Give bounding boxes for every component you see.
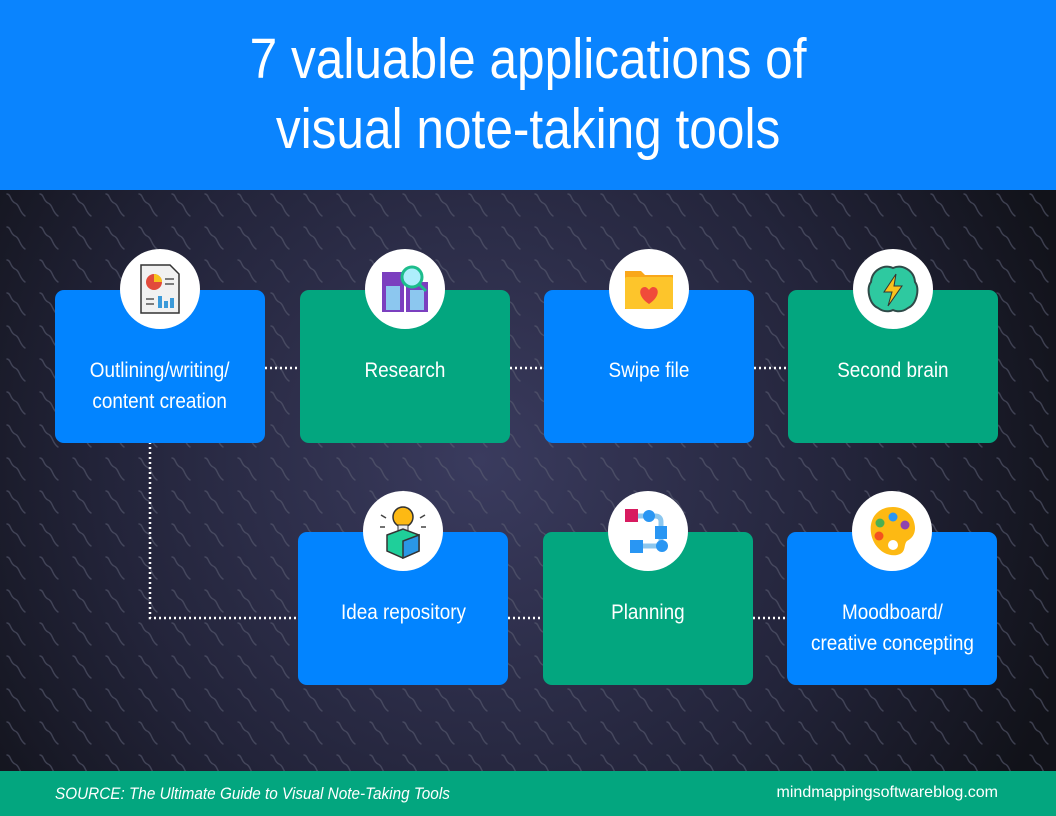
icon: research books bbox=[365, 249, 445, 329]
box: outlining: content creation bbox=[93, 390, 227, 412]
box: planning: Planning bbox=[611, 601, 685, 624]
box: second brain bbox=[788, 290, 998, 443]
box: idea repository bbox=[298, 532, 508, 685]
title: 7 valuable applications of bbox=[250, 27, 806, 91]
box: second brain: Second brain bbox=[837, 359, 949, 382]
box: outlining: Outlining/writing/ bbox=[90, 358, 230, 382]
source text: SOURCE: The Ultimate Guide to Visual Note-Taking Tools bbox=[55, 784, 450, 803]
box: moodboard: creative concepting bbox=[811, 632, 973, 654]
icon: brain bbox=[853, 249, 933, 329]
icon: idea box bbox=[363, 491, 443, 571]
background pattern bbox=[6, 190, 1056, 771]
title bbox=[0, 0, 1056, 190]
box: outlining bbox=[55, 290, 265, 443]
box: idea repository: Idea repository bbox=[340, 601, 466, 624]
title: visual note-taking tools bbox=[276, 97, 780, 161]
box: moodboard bbox=[787, 532, 997, 685]
website: mindmappingsoftwareblog.com bbox=[777, 784, 998, 801]
icon: flow diagram bbox=[608, 491, 688, 571]
box: planning bbox=[543, 532, 753, 685]
connectors bbox=[150, 368, 788, 618]
box: research: Research bbox=[365, 359, 445, 382]
icon: folder heart bbox=[609, 249, 689, 329]
icon: document bbox=[120, 249, 200, 329]
box: swipe file: Swipe file bbox=[609, 359, 689, 382]
footer bbox=[0, 771, 1056, 816]
icon: palette bbox=[852, 491, 932, 571]
box: swipe file bbox=[544, 290, 754, 443]
box: research bbox=[300, 290, 510, 443]
box: moodboard: Moodboard/ bbox=[842, 600, 942, 624]
